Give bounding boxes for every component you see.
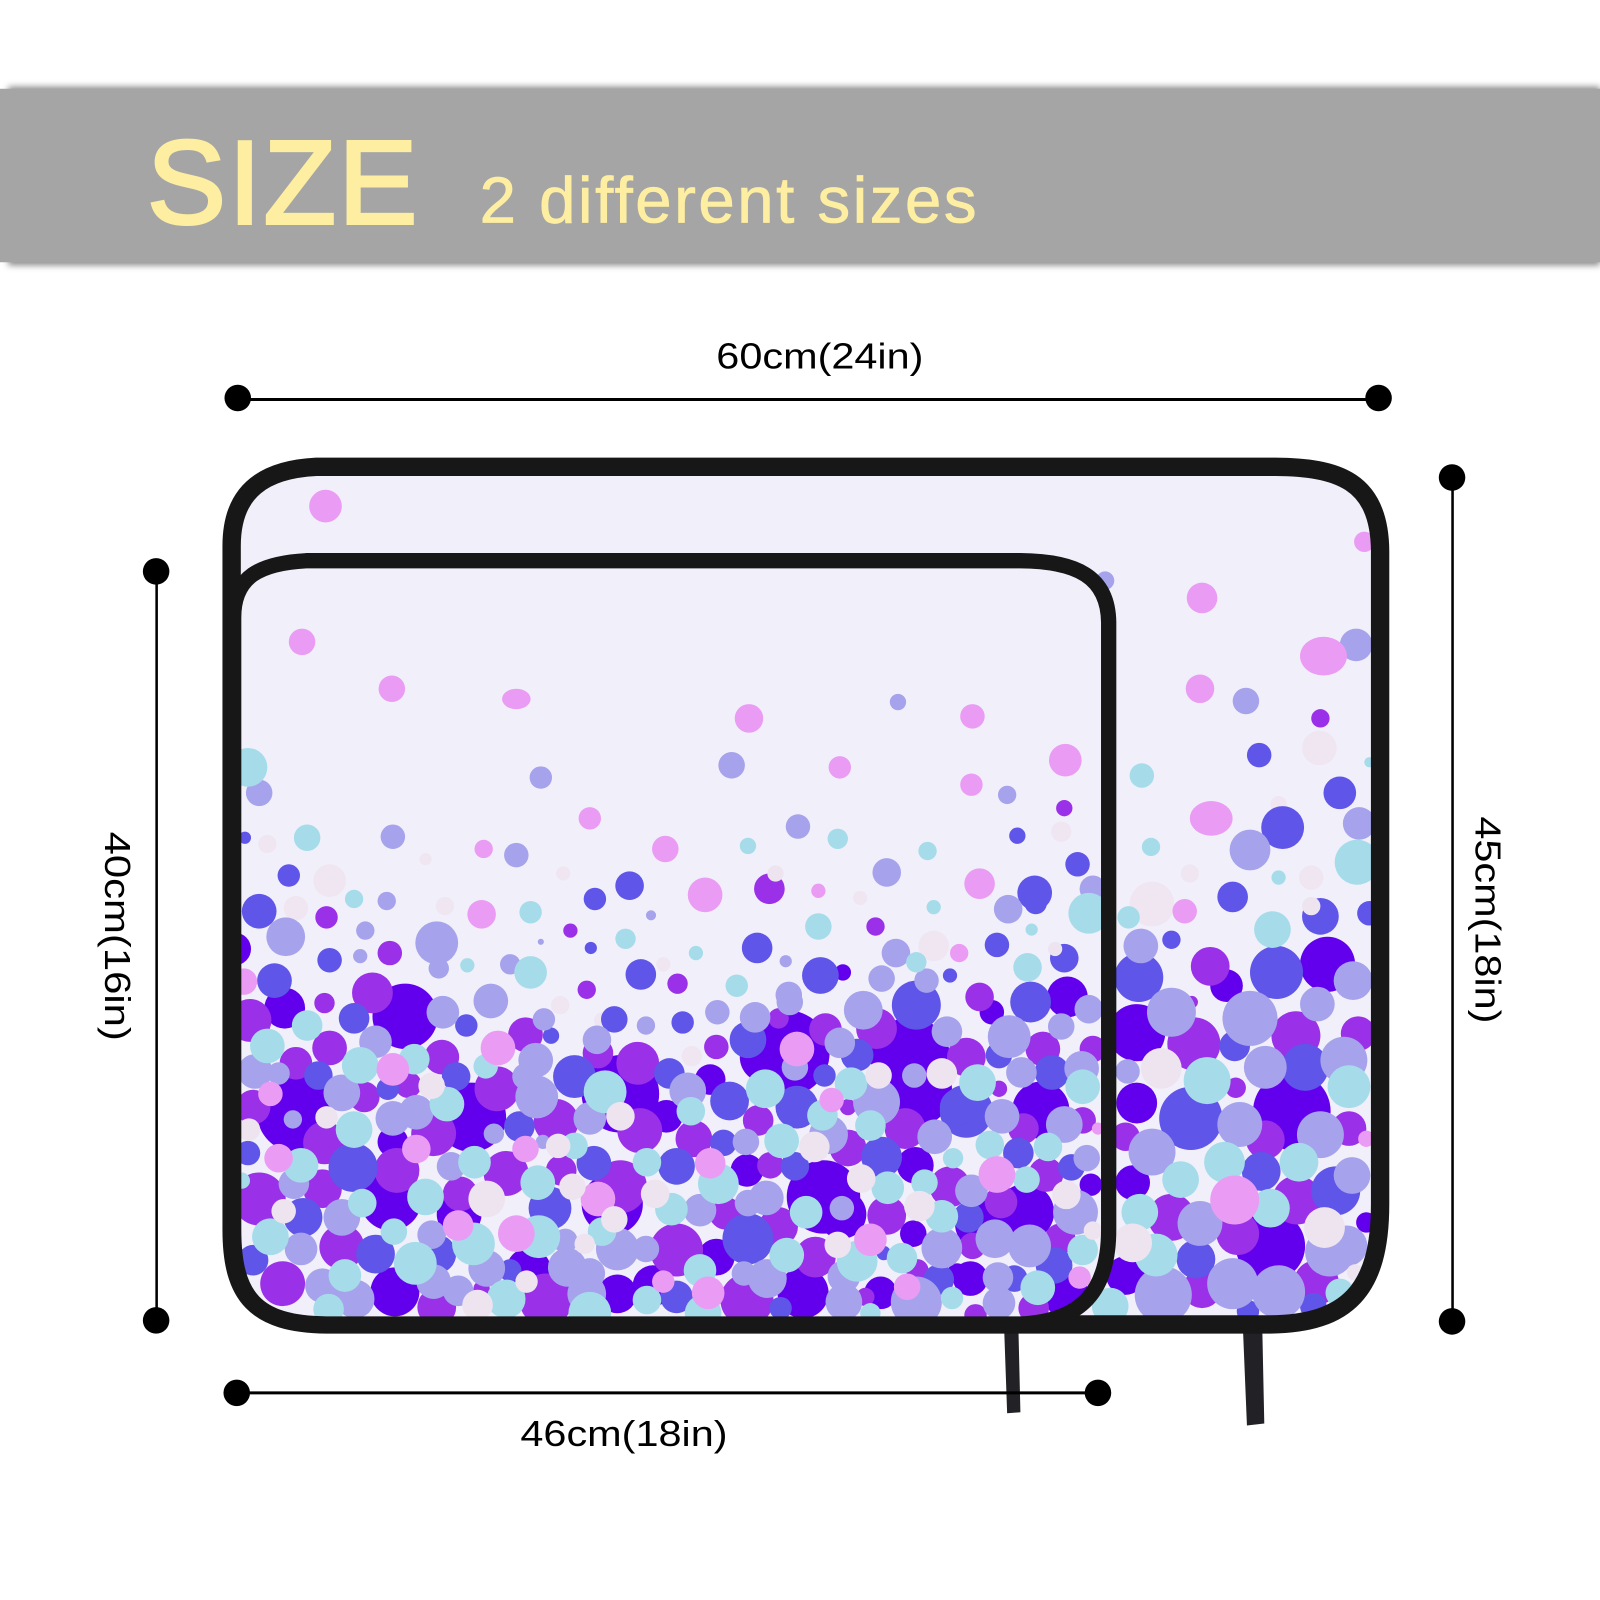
bottom dimension: 46cm width: 46cm(18in) bbox=[520, 1414, 728, 1454]
title: SIZE: SIZE bbox=[147, 117, 417, 249]
header band bbox=[0, 87, 1600, 265]
right dimension: 45cm height: 45cm(18in) bbox=[1468, 816, 1508, 1023]
left dimension: 40cm height: 40cm(16in) bbox=[97, 832, 137, 1041]
small mat confetti dots bbox=[218, 629, 1109, 1335]
large mat bbox=[232, 467, 1382, 1324]
bottom dimension: 46cm width bbox=[223, 1380, 1111, 1454]
strap: large mat bbox=[1243, 1327, 1264, 1426]
top dimension: 60cm width: 60cm(24in) bbox=[716, 336, 923, 376]
small mat bbox=[218, 561, 1109, 1335]
left dimension: 40cm height bbox=[97, 558, 169, 1334]
large mat confetti dots bbox=[309, 490, 1382, 1324]
right dimension: 45cm height bbox=[1439, 464, 1508, 1335]
strap: small mat bbox=[1004, 1327, 1020, 1413]
top dimension: 60cm width bbox=[224, 336, 1392, 411]
subtitle: 2 different sizes bbox=[480, 163, 977, 236]
